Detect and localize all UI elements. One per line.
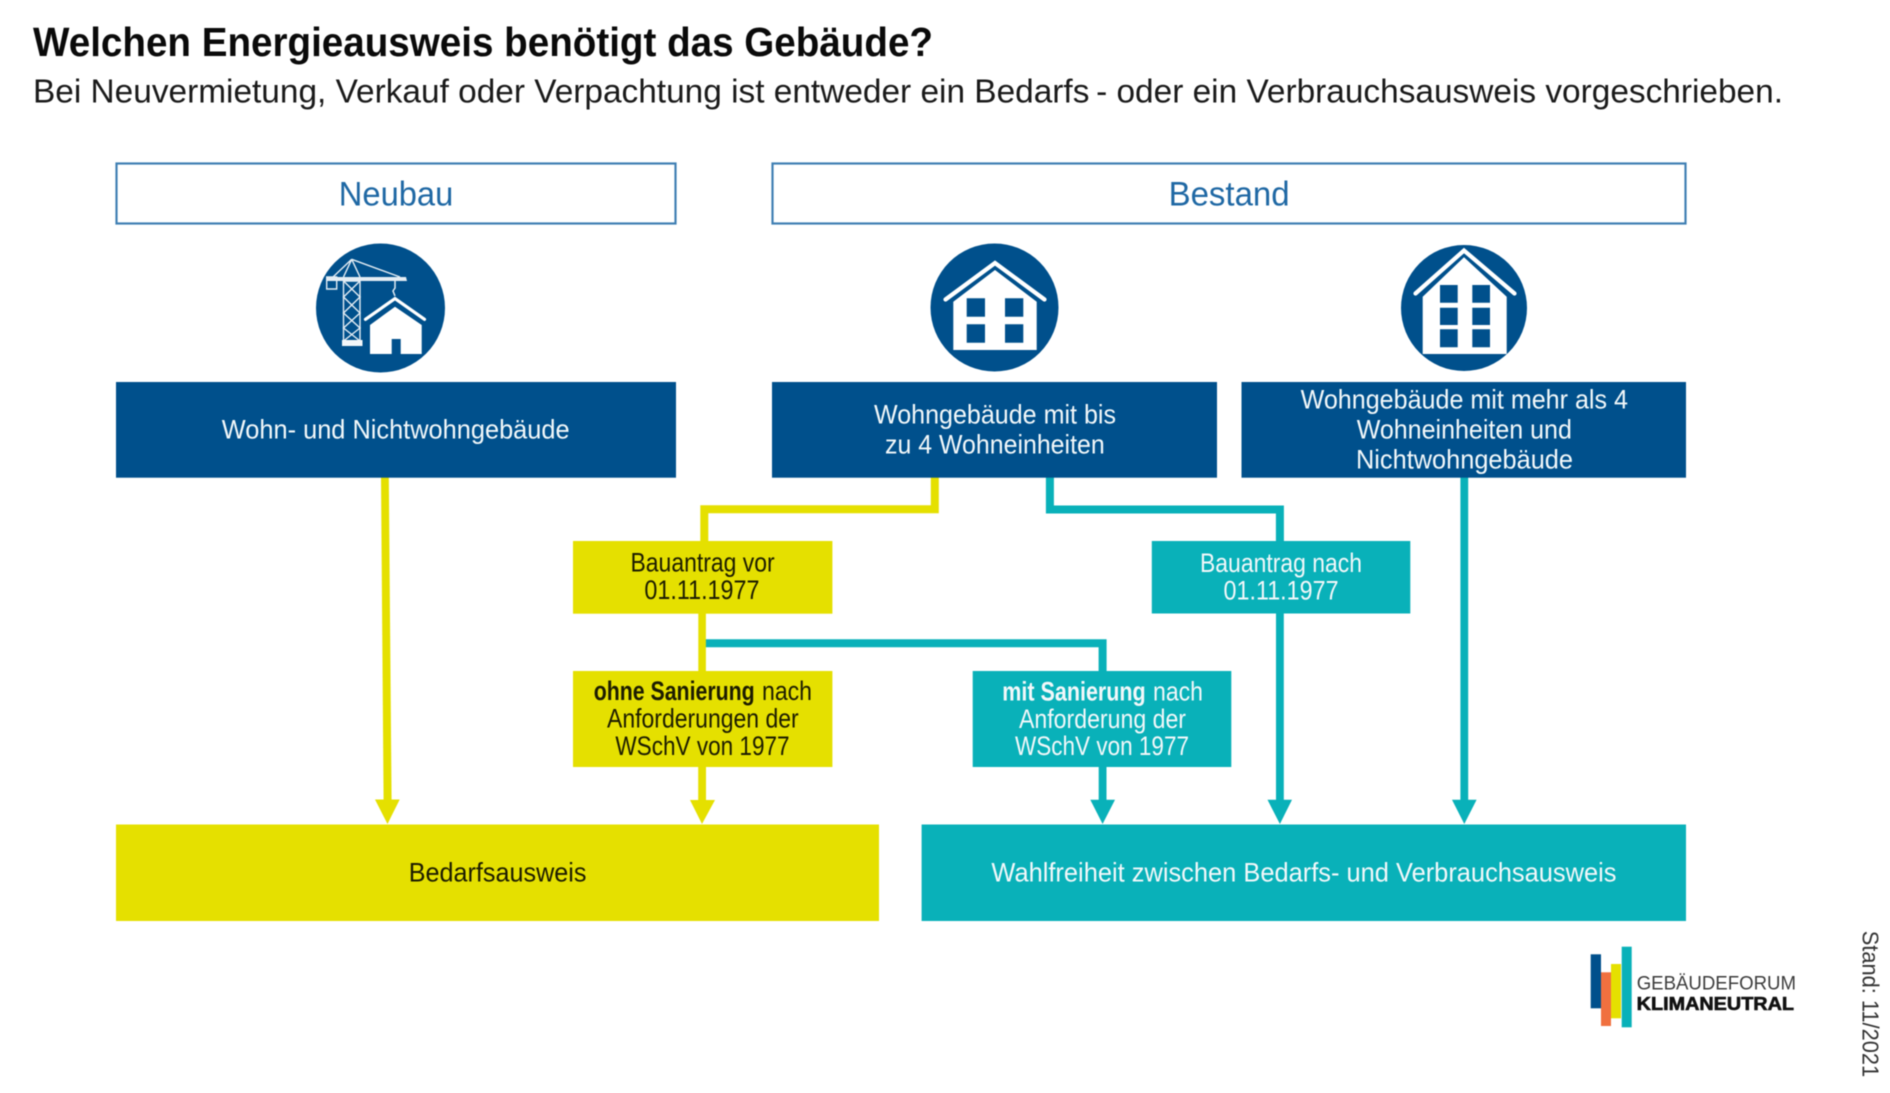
subtitle: Bei Neuvermietung, Verkauf oder Verpachtung ist entweder ein Bedarfs - oder ein Verbrauchsausweis vorgeschrieben. — [33, 74, 1783, 110]
box: Wohngebäude mit mehr als 4 Wohneinheiten und Nichtwohngebäude — [1242, 382, 1686, 478]
box: ohne Sanierung: WSchV von 1977 — [615, 731, 790, 761]
box: Wohn- und Nichtwohngebäude: Wohn- und Nichtwohngebäude — [222, 415, 570, 445]
box: mit Sanierung: WSchV von 1977 — [1015, 731, 1189, 761]
box: Bedarfsausweis: Bedarfsausweis — [409, 858, 586, 888]
header: Neubau — [116, 164, 676, 224]
box: Wohngebäude mit mehr als 4 Wohneinheiten und Nichtwohngebäude: Wohngebäude mit mehr als 4 — [1301, 384, 1628, 414]
box: ohne Sanierung: ohne Sanierung — [594, 676, 755, 706]
logo: Gebäudeforum klimaneutral: KLIMANEUTRAL — [1637, 994, 1794, 1014]
box: mit Sanierung — [973, 671, 1231, 767]
connector: Bauantrag vor to ohne Sanierung — [698, 613, 706, 672]
box: Wahlfreiheit — [922, 824, 1686, 921]
date note: Stand: 11/2021 — [1858, 931, 1884, 1077]
connector: Wohngebäude bis 4 to Bauantrag vor — [704, 477, 935, 541]
box: Wohngebäude mit bis zu 4 Wohneinheiten — [772, 382, 1217, 478]
header: Bestand — [772, 164, 1686, 224]
box: Wohngebäude mit bis zu 4 Wohneinheiten: zu 4 Wohneinheiten — [885, 429, 1105, 459]
connector: Wohngebäude bis 4 to Bauantrag nach — [1050, 477, 1280, 541]
box: Bauantrag nach 01.11.1977 — [1152, 541, 1410, 614]
header: Bestand: Bestand — [1169, 176, 1290, 214]
connector: Neubau to Bedarfsausweis — [375, 477, 400, 824]
box: Bauantrag vor 01.11.1977 — [573, 541, 832, 614]
box: Wohngebäude mit mehr als 4 Wohneinheiten und Nichtwohngebäude: Wohneinheiten und — [1357, 414, 1572, 444]
box: ohne Sanierung: nach — [762, 676, 812, 706]
icon: large residential building — [1401, 245, 1527, 371]
box: Wahlfreiheit: Wahlfreiheit zwischen Bedarfs- und Verbrauchsausweis — [991, 858, 1616, 888]
box: ohne Sanierung: Anforderungen der — [607, 704, 799, 734]
box: Bauantrag vor 01.11.1977: 01.11.1977 — [644, 575, 760, 605]
box: Wohngebäude mit bis zu 4 Wohneinheiten: Wohngebäude mit bis — [874, 399, 1116, 429]
box: Bauantrag nach 01.11.1977: Bauantrag nach — [1200, 548, 1362, 578]
box: mit Sanierung: Anforderung der — [1019, 704, 1186, 734]
box: Bedarfsausweis — [116, 824, 879, 921]
icon: small residential building — [930, 244, 1058, 372]
logo: Gebäudeforum klimaneutral — [1591, 947, 1796, 1027]
box: Wohngebäude mit mehr als 4 Wohneinheiten und Nichtwohngebäude: Nichtwohngebäude — [1356, 444, 1573, 474]
box: Wohn- und Nichtwohngebäude — [116, 382, 676, 478]
box: Bauantrag vor 01.11.1977: Bauantrag vor — [630, 548, 775, 578]
arrow: Wohngebäude mehr als 4 to Wahlfreiheit — [1452, 477, 1477, 824]
box: mit Sanierung: mit Sanierung — [1002, 676, 1146, 706]
header: Neubau: Neubau — [339, 176, 453, 214]
title: Welchen Energieausweis benötigt das Gebäude? — [33, 19, 933, 65]
box: mit Sanierung: nach — [1153, 676, 1203, 706]
icon: crane and house — [316, 244, 445, 372]
arrow: mit Sanierung to Wahlfreiheit — [1090, 767, 1115, 824]
box: Bauantrag nach 01.11.1977: 01.11.1977 — [1224, 576, 1339, 606]
box: ohne Sanierung — [573, 671, 832, 767]
arrow: Bauantrag nach to Wahlfreiheit — [1268, 613, 1292, 824]
connector: Bauantrag vor to mit Sanierung — [702, 643, 1103, 671]
logo: Gebäudeforum klimaneutral: GEBÄUDEFORUM — [1637, 973, 1796, 994]
arrow: ohne Sanierung to Bedarfsausweis — [690, 767, 715, 824]
